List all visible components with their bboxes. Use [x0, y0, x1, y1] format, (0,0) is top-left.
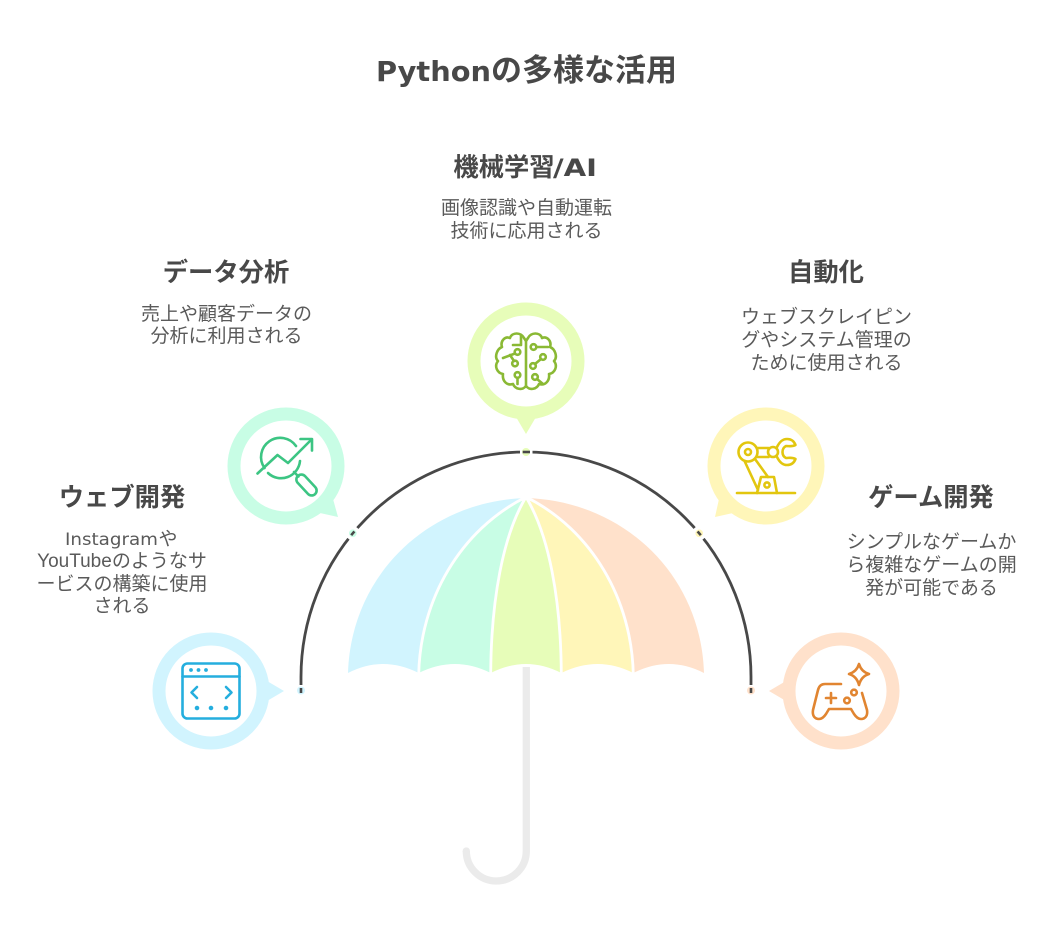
description: ために使用される [750, 352, 903, 374]
description [441, 197, 612, 242]
title: Python [376, 55, 491, 88]
description: 画像認識や自動運転 [441, 197, 612, 219]
canopy panel: peach [526, 498, 704, 673]
arc above the umbrella [297, 448, 755, 694]
marker: web [297, 686, 305, 694]
heading: /AI [553, 154, 597, 182]
panel: data analysis [141, 258, 338, 518]
bubble [769, 639, 893, 743]
description: される [93, 596, 151, 617]
description: ウェブスクレイピン [741, 305, 912, 328]
description: 発が可能である [865, 577, 998, 599]
description [741, 305, 912, 374]
panel: automation [714, 259, 912, 518]
bubble [474, 309, 578, 434]
description: 分析に利用される [150, 325, 303, 347]
icon: magnifier with rising arrow [258, 438, 319, 498]
canopy panel: mint [419, 498, 526, 673]
canopy panel: yellow [526, 498, 633, 673]
panel: machine learning / AI [441, 154, 612, 434]
heading: 自動化 [788, 259, 864, 287]
icon: robot arm [737, 439, 796, 493]
heading: データ分析 [163, 258, 289, 287]
canopy panel: blue [348, 498, 526, 673]
bubble [159, 639, 284, 743]
bubble [234, 414, 338, 518]
description [36, 528, 208, 617]
icon: code window [182, 664, 240, 718]
panel: web development [36, 483, 284, 743]
canopy panel: lime [491, 498, 561, 673]
description: ら複雑なゲームの開 [846, 554, 1017, 576]
description: Instagram [65, 530, 158, 550]
marker: automation [695, 530, 703, 537]
description: グやシステム管理の [741, 329, 912, 351]
description: 技術に応用される [450, 220, 603, 242]
description: ービスの構築に使用 [36, 573, 208, 595]
bubble [714, 414, 818, 518]
umbrella handle [463, 667, 526, 881]
description: 売上や顧客データの [141, 303, 312, 325]
icon: game controller with sparkle [813, 664, 869, 719]
title [376, 53, 677, 88]
heading: ゲーム開発 [868, 484, 994, 512]
description: シンプルなゲームか [847, 531, 1016, 553]
panel: game development [769, 484, 1017, 743]
marker: machine learning [522, 448, 530, 456]
description: YouTubeのようなサ [37, 551, 207, 572]
description [846, 531, 1017, 599]
description [141, 303, 312, 347]
description: や [158, 528, 178, 550]
heading: 機械学習 [453, 154, 555, 182]
marker: game [747, 686, 755, 694]
umbrella canopy [348, 497, 704, 675]
heading: ウェブ開発 [59, 483, 185, 512]
marker: data [349, 530, 357, 537]
icon: brain circuit [496, 334, 556, 389]
title: の多様な活用 [491, 53, 677, 88]
